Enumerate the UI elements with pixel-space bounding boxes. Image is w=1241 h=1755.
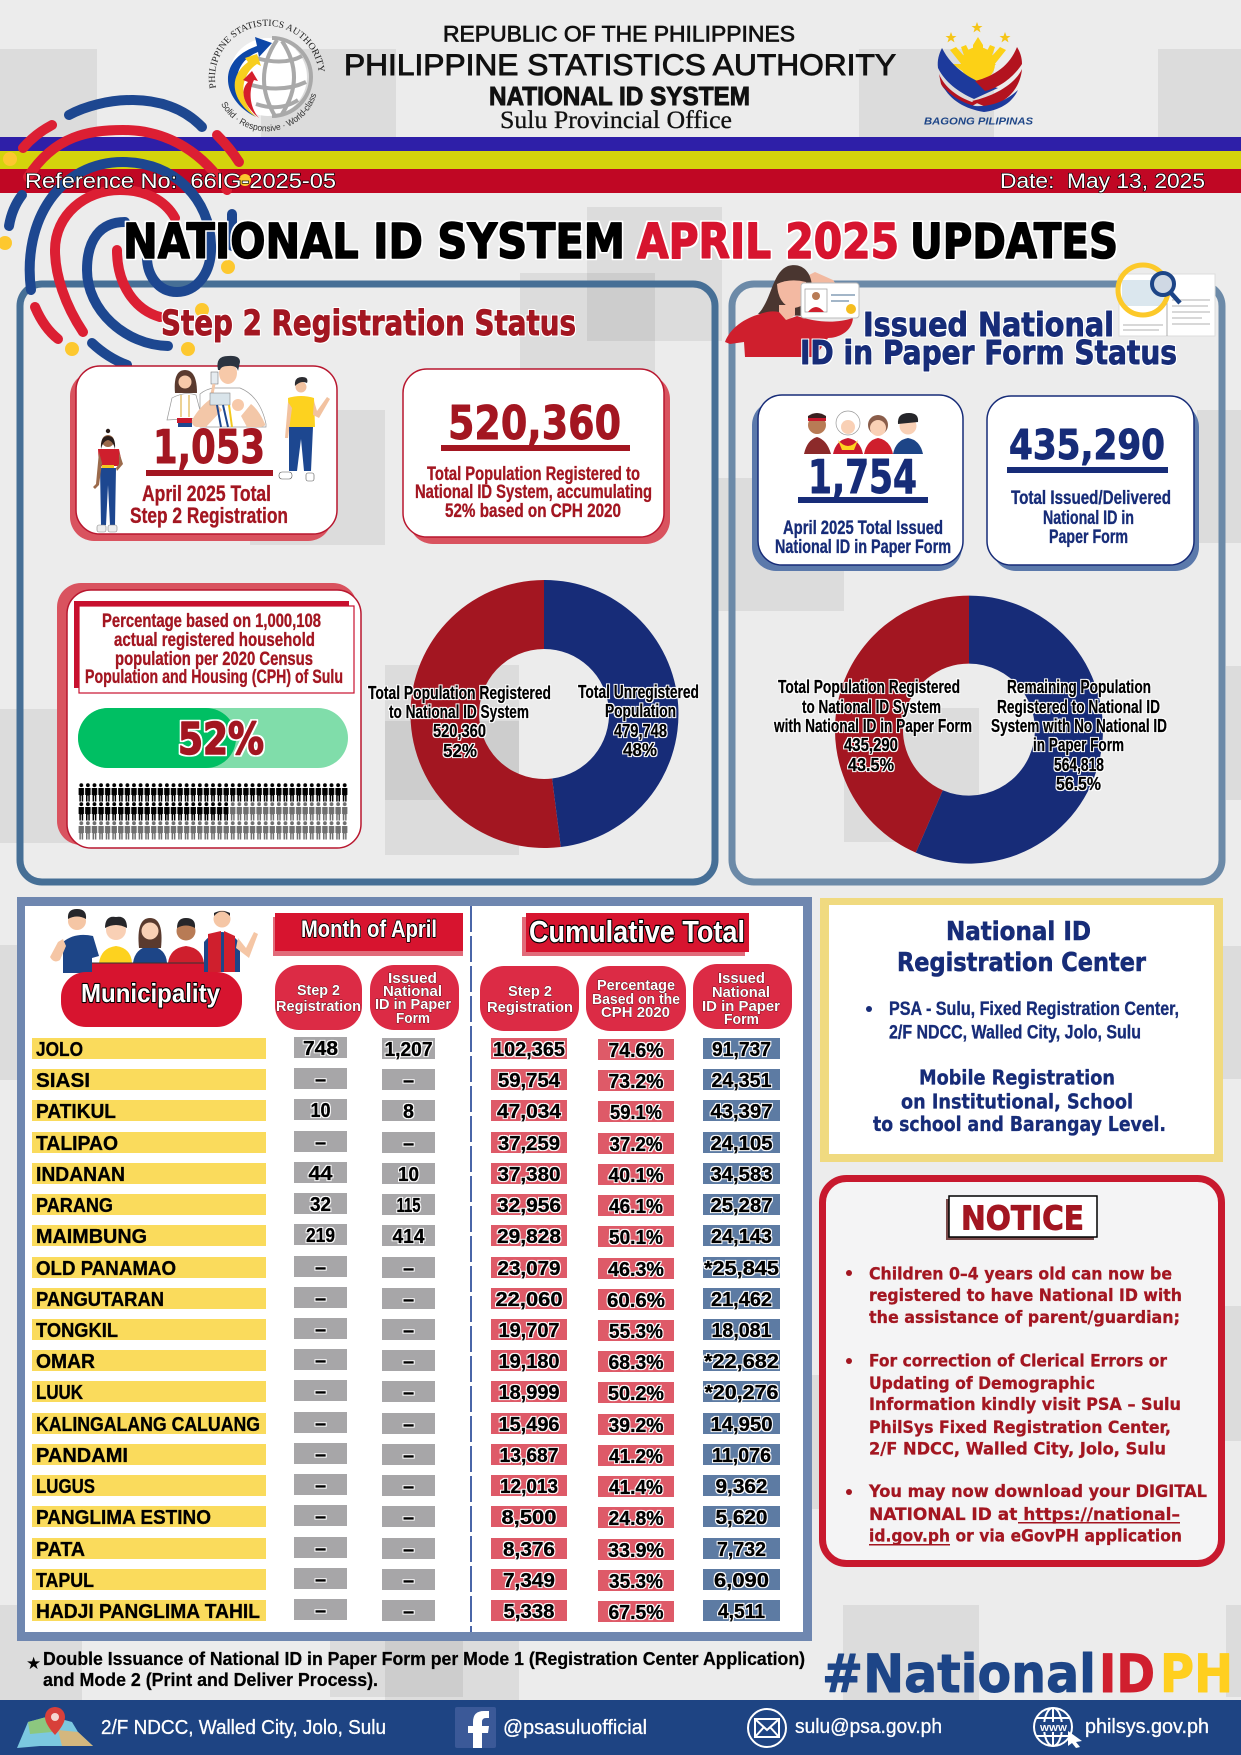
heading: Issued National ID in Paper Form Status: ID in Paper Form Status	[800, 333, 1177, 372]
row: PATA: 33.9%	[608, 1540, 664, 1562]
row: OLD PANAMAO: 23,079	[498, 1258, 560, 1280]
card: total issued ID: Paper Form	[1049, 527, 1128, 548]
note box: population per 2020 Census	[115, 649, 313, 670]
row: TALIPAO: 37.2%	[610, 1134, 663, 1156]
row: OMAR: 68.3%	[608, 1352, 664, 1374]
donut labels left	[368, 683, 551, 761]
row: SIASI: 73.2%	[608, 1071, 664, 1093]
row: LUUK: 50.2%	[608, 1383, 664, 1405]
icon: facebook	[455, 1707, 496, 1748]
notice title: NOTICE	[961, 1198, 1084, 1238]
facebook handle: @psasuluofficial	[503, 1717, 647, 1739]
row: PANGUTARAN: 21,462	[711, 1289, 772, 1311]
row: PARANG: 46.1%	[609, 1196, 663, 1218]
logo: Bagong Pilipinas: BAGONG PILIPINAS	[924, 116, 1033, 128]
row: KALINGALANG CALUANG: 39.2%	[608, 1415, 664, 1437]
row: PARANG	[32, 1193, 780, 1218]
row: KALINGALANG CALUANG: –	[403, 1414, 414, 1436]
header: Municipality	[61, 972, 242, 1027]
row: PANGUTARAN: 60.6%	[607, 1290, 665, 1312]
footnote	[26, 1649, 805, 1690]
row: HADJI PANGLIMA TAHIL: –	[403, 1601, 414, 1623]
row: LUGUS: 9,362	[716, 1476, 768, 1498]
row: PANGLIMA ESTINO: –	[403, 1507, 414, 1529]
column header: issued cumulative	[693, 964, 792, 1029]
icon: four faces	[804, 411, 923, 454]
email: sulu@psa.gov.ph	[795, 1716, 942, 1738]
notice bullet 2: 2/F NDCC, Walled City, Jolo, Sulu	[869, 1440, 1166, 1460]
donut labels right: in Paper Form	[1033, 735, 1124, 755]
row: KALINGALANG CALUANG: 15,496	[498, 1414, 560, 1436]
note box: actual registered household	[114, 630, 315, 651]
column header: percentage: Percentage	[597, 977, 675, 994]
donut labels left: 520,360	[433, 721, 486, 741]
value: 520,360: 520,360	[448, 396, 621, 450]
row: PATA: –	[403, 1539, 414, 1561]
panel: National ID Registration Center	[820, 898, 1223, 1162]
card: total population registered: National ID System, accumulating	[415, 482, 652, 503]
row: LUGUS: 12,013	[500, 1476, 558, 1498]
row: PATA: 8,376	[503, 1539, 555, 1561]
donut labels left: 435,290	[844, 735, 898, 755]
header: Month of April	[273, 913, 463, 956]
row: PATIKUL: 43,397	[710, 1101, 772, 1123]
row: HADJI PANGLIMA TAHIL	[32, 1599, 780, 1624]
card: April issued ID: National ID in Paper Form	[775, 537, 951, 558]
card: April issued ID: April 2025 Total Issued	[783, 518, 943, 539]
row: PARANG: 25,287	[710, 1195, 772, 1217]
column header: issued monthly: National	[383, 983, 442, 1000]
notice bullet 2	[846, 1352, 1181, 1460]
column header: step 2 cumulative	[480, 966, 579, 1031]
row: PARANG: 115	[396, 1195, 420, 1217]
row: JOLO	[32, 1037, 780, 1062]
panel: National ID Registration Center: National ID	[946, 917, 1091, 947]
row: LUUK: –	[315, 1381, 326, 1403]
column header: issued monthly: Issued	[388, 970, 437, 987]
value: 1,754: 1,754	[808, 450, 917, 504]
row: OMAR: –	[403, 1351, 414, 1373]
row: JOLO: JOLO	[36, 1039, 83, 1061]
donut labels right	[991, 677, 1167, 794]
row: PANGLIMA ESTINO	[32, 1505, 780, 1530]
row: PATA: PATA	[36, 1539, 85, 1561]
column header: issued cumulative: ID in Paper	[702, 998, 780, 1015]
icon: woman holding ID	[725, 265, 859, 357]
row: INDANAN: 44	[308, 1163, 333, 1185]
donut labels left: Total Population Registered	[778, 677, 960, 697]
footnote: Double Issuance of National ID in Paper Form per Mode 1 (Registration Center Application)	[43, 1649, 805, 1669]
column header: step 2 monthly: Registration	[276, 998, 361, 1015]
row: TONGKIL: 19,707	[498, 1320, 560, 1342]
column header: percentage: CPH 2020	[601, 1004, 670, 1021]
row: PANGLIMA ESTINO: 5,620	[716, 1507, 768, 1529]
row: LUGUS: –	[403, 1476, 414, 1498]
row: PANDAMI: PANDAMI	[36, 1445, 128, 1467]
row: TONGKIL: –	[403, 1320, 414, 1342]
row: SIASI: –	[403, 1070, 414, 1092]
row: PANGUTARAN: PANGUTARAN	[36, 1289, 164, 1311]
row: PANDAMI: 41.2%	[609, 1446, 663, 1468]
row: PANDAMI: 11,076	[712, 1445, 771, 1467]
row: KALINGALANG CALUANG: 14,950	[710, 1414, 772, 1436]
column header: step 2 cumulative: Step 2	[508, 983, 552, 1000]
row: KALINGALANG CALUANG: –	[315, 1413, 326, 1435]
row: JOLO: 102,365	[493, 1039, 565, 1061]
header: Month of April: Month of April	[301, 916, 437, 943]
footnote: ★	[26, 1654, 41, 1674]
donut labels left: 52%	[443, 741, 477, 761]
heading: Issued National ID in Paper Form Status	[800, 305, 1177, 372]
icon: globe	[1034, 1708, 1082, 1748]
heading: Step 2 Registration Status: Step 2 Registration Status	[161, 304, 576, 344]
notice bullet 3: You may now download your DIGITAL	[868, 1482, 1207, 1502]
row: LUUK	[32, 1380, 780, 1405]
notice bullet 2: Information kindly visit PSA – Sulu	[869, 1395, 1181, 1415]
header: Cumulative Total: Cumulative Total	[529, 914, 745, 949]
header text: PHILIPPINE STATISTICS AUTHORITY	[344, 49, 896, 82]
color bands	[0, 137, 1241, 193]
logo: Bagong Pilipinas	[924, 22, 1033, 128]
column header: step 2 monthly	[275, 965, 362, 1030]
icon: five people	[50, 909, 258, 973]
row: OLD PANAMAO: –	[315, 1257, 326, 1279]
row: OLD PANAMAO: OLD PANAMAO	[36, 1258, 176, 1280]
footer bar	[0, 1700, 1241, 1755]
panel: National ID Registration Center: PSA - Sulu, Fixed Registration Center,	[889, 999, 1179, 1020]
reference number: Reference No: 66IG-2025-05	[25, 170, 336, 193]
notice bullet 1: Children 0–4 years old can now be	[869, 1264, 1172, 1284]
row: LUGUS: –	[315, 1475, 326, 1497]
row: PATIKUL: 10	[310, 1100, 330, 1122]
row: PANGLIMA ESTINO: 24.8%	[608, 1508, 664, 1530]
column header: percentage: Based on the	[592, 991, 680, 1008]
row: LUGUS	[32, 1474, 780, 1499]
header: Municipality: Municipality	[81, 978, 220, 1008]
notice bullet 1: the assistance of parent/guardian;	[869, 1308, 1180, 1328]
column header: issued cumulative: Issued	[718, 970, 765, 987]
notice bullet 1	[846, 1264, 1182, 1328]
row: OLD PANAMAO: –	[403, 1258, 414, 1280]
icon: people with IDs	[167, 356, 266, 427]
icon: documents and magnifier	[1118, 265, 1215, 336]
header text: NATIONAL ID SYSTEM	[489, 81, 750, 111]
hashtag: #National	[822, 1644, 1096, 1705]
row: PANDAMI: 13,687	[500, 1445, 558, 1467]
row: TAPUL: 7,349	[503, 1570, 555, 1592]
row: JOLO: 1,207	[384, 1039, 432, 1061]
main title: NATIONAL ID SYSTEM	[123, 214, 625, 270]
row: LUGUS: 41.4%	[609, 1477, 663, 1499]
row: PATA	[32, 1537, 780, 1562]
row: PANGUTARAN	[32, 1287, 780, 1312]
notice bullet 3	[846, 1482, 1207, 1547]
row: LUGUS: LUGUS	[36, 1476, 95, 1498]
row: PATIKUL: 8	[403, 1101, 414, 1123]
panel: National ID Registration Center: Registration Center	[897, 948, 1146, 978]
main title: UPDATES	[910, 214, 1118, 270]
row: TONGKIL: –	[315, 1319, 326, 1341]
row: TALIPAO: –	[403, 1133, 414, 1155]
panel: Notice	[822, 1178, 1222, 1564]
row: INDANAN: 34,583	[710, 1164, 772, 1186]
donut chart: issued vs remaining	[773, 596, 1167, 864]
row: TAPUL: 35.3%	[609, 1571, 663, 1593]
row: JOLO: 91,737	[712, 1039, 771, 1061]
icon: mail	[748, 1709, 786, 1747]
row: INDANAN: INDANAN	[36, 1164, 125, 1186]
icon: map pin	[17, 1707, 93, 1748]
row: OLD PANAMAO: *25,845	[704, 1258, 779, 1280]
row: PANGLIMA ESTINO: 8,500	[502, 1507, 556, 1529]
note box: Percentage based on 1,000,108	[102, 611, 321, 632]
note box	[74, 601, 354, 693]
column header: step 2 cumulative: Registration	[487, 999, 573, 1016]
notice bullet 1: registered to have National ID with	[869, 1286, 1182, 1306]
donut labels left: 43.5%	[848, 755, 894, 775]
icon: globe: WWW	[1040, 1723, 1068, 1733]
row: OLD PANAMAO: 46.3%	[608, 1259, 664, 1281]
icon: fingerprint	[0, 100, 251, 365]
row: PANGLIMA ESTINO: PANGLIMA ESTINO	[36, 1507, 211, 1529]
donut labels right: 56.5%	[1056, 774, 1101, 794]
donut labels left	[773, 677, 972, 775]
row: MAIMBUNG: MAIMBUNG	[36, 1226, 147, 1248]
column header: issued cumulative: National	[712, 984, 770, 1001]
row: PANGUTARAN: –	[315, 1288, 326, 1310]
row: OMAR: –	[315, 1350, 326, 1372]
row: SIASI: SIASI	[36, 1070, 90, 1092]
donut labels right: Remaining Population	[1007, 677, 1151, 697]
card: total population registered	[403, 369, 670, 544]
column header: issued monthly	[370, 965, 459, 1030]
value: 435,290: 435,290	[1009, 421, 1165, 469]
icon: standing man	[279, 377, 330, 481]
card: total issued ID	[987, 396, 1199, 571]
row: PARANG: 32	[310, 1194, 331, 1216]
hashtag: ID	[1099, 1644, 1155, 1705]
donut labels right: System with No National ID	[991, 716, 1167, 736]
panel: National ID Registration Center: 2/F NDCC, Walled City, Jolo, Sulu	[889, 1022, 1141, 1044]
donut labels right	[578, 682, 699, 760]
row: MAIMBUNG: 50.1%	[609, 1227, 663, 1249]
row: PARANG: PARANG	[36, 1195, 113, 1217]
row: MAIMBUNG: 29,828	[497, 1226, 561, 1248]
donut labels right: 564,818	[1054, 755, 1104, 775]
row: SIASI: 59,754	[498, 1070, 561, 1092]
row: INDANAN: 40.1%	[608, 1165, 664, 1187]
row: HADJI PANGLIMA TAHIL: HADJI PANGLIMA TAHIL	[36, 1601, 260, 1623]
row: PATA: –	[315, 1538, 326, 1560]
logo: PSA seal: PHILIPPINE STATISTICS AUTHORITY	[208, 20, 325, 89]
row: MAIMBUNG: 414	[392, 1226, 425, 1248]
main title	[123, 214, 1118, 270]
row: PATIKUL	[32, 1099, 780, 1124]
donut labels left: Total Population Registered	[368, 683, 551, 703]
donut labels left: to National ID System	[802, 697, 941, 717]
pictogram rows	[78, 783, 348, 840]
notice bullet 2: PhilSys Fixed Registration Center,	[869, 1418, 1171, 1438]
panel: National ID Registration Center: Mobile Registration	[919, 1066, 1115, 1090]
row: TONGKIL	[32, 1318, 780, 1343]
progress bar 52%: 52%	[178, 714, 264, 765]
column header: issued monthly: Form	[396, 1010, 430, 1027]
left panel frame: Step 2 registration	[20, 284, 715, 882]
logo: PSA seal: Solid · Responsive · World-class	[222, 94, 316, 132]
row: TONGKIL: 55.3%	[609, 1321, 663, 1343]
value: 1,053: 1,053	[153, 420, 265, 474]
row: MAIMBUNG: 24,143	[711, 1226, 772, 1248]
row: HADJI PANGLIMA TAHIL: 67.5%	[608, 1602, 664, 1624]
icon: standing woman	[93, 429, 123, 532]
row: INDANAN: 10	[398, 1164, 419, 1186]
date: Date: May 13, 2025	[1000, 170, 1205, 193]
progress bar 52%	[78, 708, 348, 768]
row: OMAR: 19,180	[498, 1351, 560, 1373]
hashtag: PH	[1160, 1644, 1233, 1705]
row: TONGKIL: TONGKIL	[36, 1320, 118, 1342]
panel: National ID Registration Center: on Institutional, School	[901, 1090, 1133, 1114]
row: TAPUL: –	[315, 1569, 326, 1591]
row: PANDAMI: –	[403, 1445, 414, 1467]
right panel frame: issued national ID	[732, 284, 1222, 882]
note box: Population and Housing (CPH) of Sulu	[85, 667, 343, 688]
donut labels right: Total Unregistered	[578, 682, 699, 702]
notice bullet 2: Updating of Demographic	[869, 1374, 1095, 1394]
row: OMAR: *22,682	[704, 1351, 779, 1373]
notice bullet 3: id.gov.ph or via eGovPH application	[869, 1527, 1182, 1547]
row: INDANAN	[32, 1162, 780, 1187]
row: TALIPAO: 24,105	[710, 1133, 772, 1155]
header text: Sulu Provincial Office	[500, 107, 732, 134]
column header: step 2 monthly: Step 2	[297, 982, 340, 999]
row: SIASI	[32, 1068, 780, 1093]
row: TONGKIL: 18,081	[712, 1320, 772, 1342]
row: MAIMBUNG: 219	[306, 1225, 335, 1247]
row: TAPUL: TAPUL	[36, 1570, 94, 1592]
row: OMAR	[32, 1349, 780, 1374]
heading: Issued National ID in Paper Form Status: Issued National	[863, 305, 1114, 344]
row: TAPUL	[32, 1568, 780, 1593]
row: TALIPAO: TALIPAO	[36, 1133, 118, 1155]
logo: PSA seal	[208, 20, 325, 132]
panel: municipality table	[17, 897, 812, 1641]
row: OMAR: OMAR	[36, 1351, 96, 1373]
column header: percentage	[586, 966, 686, 1031]
row: PANDAMI: –	[315, 1444, 326, 1466]
row: LUUK: –	[403, 1382, 414, 1404]
card: April step 2 registration	[70, 356, 337, 541]
row: TAPUL: –	[403, 1570, 414, 1592]
card: percentage and progress	[57, 583, 361, 848]
donut labels right: Population	[605, 701, 676, 721]
row: OLD PANAMAO	[32, 1256, 780, 1281]
header text	[344, 22, 896, 134]
row: PANGLIMA ESTINO: –	[315, 1506, 326, 1528]
row: JOLO: 74.6%	[608, 1040, 664, 1062]
card: total population registered: Total Population Registered to	[427, 464, 640, 485]
row: SIASI: 24,351	[712, 1070, 772, 1092]
donut labels right: 479,748	[614, 721, 667, 741]
row: PATIKUL: 59.1%	[610, 1102, 662, 1124]
footnote: and Mode 2 (Print and Deliver Process).	[43, 1670, 378, 1690]
row: PANGUTARAN: 22,060	[496, 1289, 562, 1311]
row: KALINGALANG CALUANG	[32, 1412, 780, 1437]
card: total population registered: 52% based on CPH 2020	[445, 501, 621, 522]
row: PATIKUL: 47,034	[497, 1101, 562, 1123]
card: April step 2 registration: April 2025 Total	[142, 481, 271, 506]
card: April issued ID	[752, 395, 963, 571]
row: HADJI PANGLIMA TAHIL: 4,511	[718, 1601, 765, 1623]
row: PARANG: 32,956	[497, 1195, 561, 1217]
row: SIASI: –	[315, 1069, 326, 1091]
donut labels right: 48%	[623, 740, 657, 760]
main title: APRIL 2025	[637, 214, 899, 270]
row: HADJI PANGLIMA TAHIL: 5,338	[504, 1601, 554, 1623]
notice bullet 3: NATIONAL ID at https://national–	[869, 1505, 1180, 1525]
row: LUUK: 18,999	[498, 1382, 560, 1404]
website: philsys.gov.ph	[1085, 1716, 1209, 1738]
row: LUUK: *20,276	[704, 1382, 778, 1404]
column header: issued monthly: ID in Paper	[375, 996, 451, 1013]
header text: REPUBLIC OF THE PHILIPPINES	[443, 22, 795, 47]
row: TALIPAO: 37,259	[498, 1133, 560, 1155]
row: LUUK: LUUK	[36, 1382, 83, 1404]
donut labels right: Registered to National ID	[997, 697, 1160, 717]
row: PANGUTARAN: –	[403, 1289, 414, 1311]
address: 2/F NDCC, Walled City, Jolo, Sulu	[101, 1717, 386, 1739]
donut labels left: to National ID System	[389, 702, 529, 722]
row: TAPUL: 6,090	[714, 1570, 769, 1592]
row: JOLO: 748	[303, 1038, 338, 1060]
donut chart: registered vs unregistered	[368, 580, 699, 848]
notice bullet 2: For correction of Clerical Errors or	[869, 1352, 1168, 1372]
card: total issued ID: National ID in	[1043, 508, 1134, 529]
card: total issued ID: Total Issued/Delivered	[1011, 488, 1171, 509]
row: MAIMBUNG	[32, 1224, 780, 1249]
row: PATA: 7,732	[717, 1539, 766, 1561]
row: HADJI PANGLIMA TAHIL: –	[315, 1600, 326, 1622]
row: TALIPAO	[32, 1131, 780, 1156]
row: PATIKUL: PATIKUL	[36, 1101, 116, 1123]
card: April step 2 registration: Step 2 Registration	[130, 503, 288, 528]
row: KALINGALANG CALUANG: KALINGALANG CALUANG	[36, 1414, 260, 1436]
panel: National ID Registration Center: to school and Barangay Level.	[873, 1112, 1166, 1136]
column header: issued cumulative: Form	[724, 1011, 759, 1028]
donut labels left: with National ID in Paper Form	[773, 716, 972, 736]
row: PANDAMI	[32, 1443, 780, 1468]
row: TALIPAO: –	[315, 1132, 326, 1154]
row: INDANAN: 37,380	[498, 1164, 560, 1186]
